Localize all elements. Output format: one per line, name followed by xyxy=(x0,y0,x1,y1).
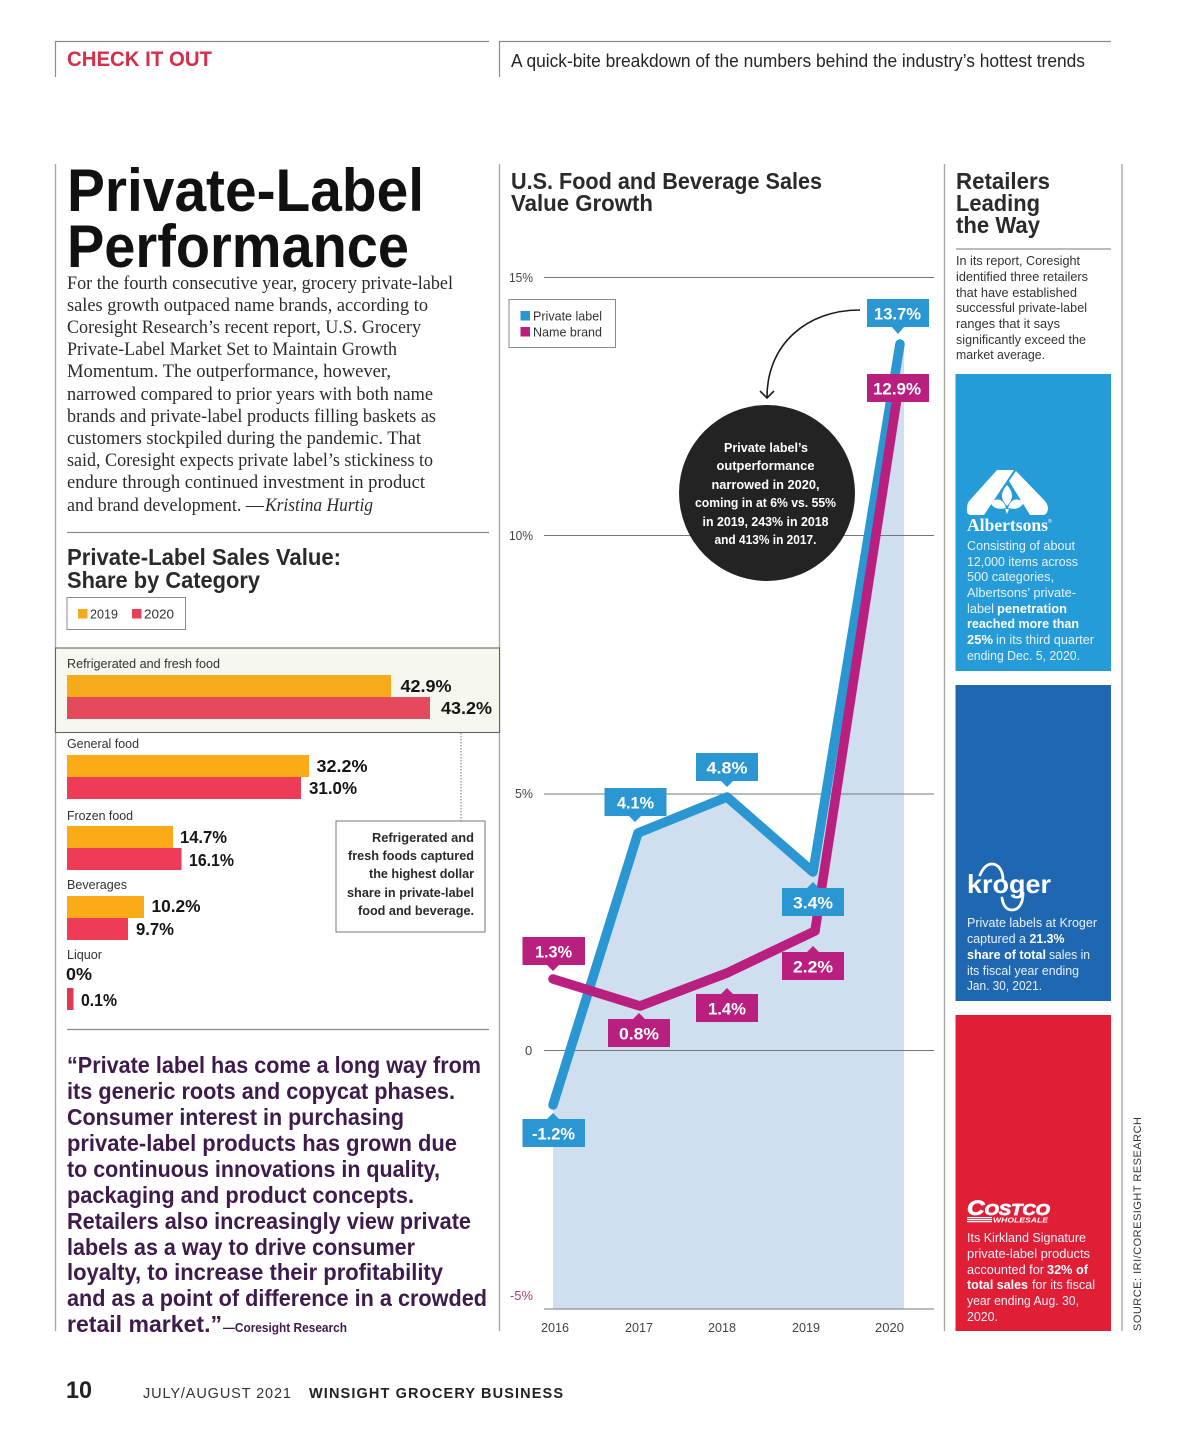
bar chart legend: 2020 xyxy=(144,606,174,622)
pull quote: its generic roots and copycat phases. xyxy=(67,1078,455,1104)
Kroger text: captured a xyxy=(967,932,1027,946)
data label: name brand 2016: 1.3% xyxy=(535,942,572,962)
bar chart heading xyxy=(67,544,341,593)
y axis and gridlines: 15% xyxy=(509,270,533,285)
Costco text xyxy=(967,1231,1095,1324)
pull quote: Retailers also increasingly view private xyxy=(67,1208,471,1234)
footer: page number: 10 xyxy=(66,1377,92,1404)
x axis labels: 2019 xyxy=(792,1320,820,1335)
bars: refrigerated and fresh food: Refrigerated and fresh food xyxy=(67,656,220,671)
Kroger text: Jan. 30, 2021. xyxy=(967,979,1042,993)
bars: liquor: 0% xyxy=(66,964,92,984)
bars: frozen food: Frozen food xyxy=(67,808,133,823)
icon: Albertsons logo: Albertsons xyxy=(967,515,1048,535)
icon: Albertsons logo xyxy=(967,470,1052,535)
bars: general food: 32.2% xyxy=(316,756,368,776)
retailers heading: Leading xyxy=(956,190,1040,216)
Kroger text xyxy=(967,916,1098,993)
Costco text: 2020. xyxy=(967,1310,998,1324)
header subtitle: A quick-bite breakdown of the numbers behind the industry’s hottest trends xyxy=(511,51,1085,71)
Albertsons text: 25% xyxy=(967,633,993,647)
retailers intro text xyxy=(956,254,1088,362)
callout: refrigerated and fresh foods: Refrigerated and xyxy=(372,831,474,845)
pull quote: private-label products has grown due xyxy=(67,1130,457,1156)
bars: liquor xyxy=(66,947,117,1010)
intro text block: customers stockpiled during the pandemic. That xyxy=(67,429,422,449)
Albertsons text xyxy=(967,539,1095,663)
bars: general food: General food xyxy=(67,736,139,751)
bars: refrigerated and fresh food: 43.2% xyxy=(441,698,492,718)
retailers heading: Retailers xyxy=(956,168,1050,194)
bars: general food: 31.0% xyxy=(309,778,357,798)
x axis labels: 2017 xyxy=(625,1320,653,1335)
footer: issue date: JULY/AUGUST 2021 xyxy=(143,1386,291,1402)
area under private label line xyxy=(553,343,904,1309)
Albertsons text: 12,000 items across xyxy=(967,555,1078,569)
pull quote: —Coresight Research xyxy=(223,1320,347,1335)
bar chart heading: Share by Category xyxy=(67,567,260,593)
footer: publication: WINSIGHT GROCERY BUSINESS xyxy=(309,1386,563,1402)
Costco text: Its Kirkland Signature xyxy=(967,1231,1086,1245)
retailers intro text: successful private-label xyxy=(956,301,1087,315)
retailers heading: the Way xyxy=(956,212,1040,238)
Kroger text: share of total xyxy=(967,948,1046,962)
y axis and gridlines xyxy=(509,270,934,1309)
title xyxy=(67,157,424,280)
line chart legend: Name brand xyxy=(533,324,602,340)
callout circle: outperformance: narrowed in 2020, xyxy=(712,478,820,492)
intro text block: endure through continued investment in product xyxy=(67,473,426,493)
title: Performance xyxy=(67,213,409,280)
pull quote: retail market.” xyxy=(67,1311,222,1337)
pull quote xyxy=(67,1052,487,1337)
y axis and gridlines: 0 xyxy=(525,1043,532,1058)
callout circle: outperformance xyxy=(679,405,855,581)
bar chart legend: 2019 xyxy=(90,606,118,622)
bars: general food xyxy=(67,736,368,799)
pull quote: and as a point of difference in a crowded xyxy=(67,1285,487,1311)
data label: private label 2017 xyxy=(604,788,666,822)
line: name brand xyxy=(553,385,899,1006)
bars: frozen food: 16.1% xyxy=(189,850,234,870)
bars: liquor: 0.1% xyxy=(81,990,117,1010)
data label: private label 2016: -1.2% xyxy=(532,1124,575,1144)
retailers intro text: significantly exceed the xyxy=(956,333,1086,347)
line chart heading: U.S. Food and Beverage Sales xyxy=(511,168,822,194)
data label: name brand 2017: 0.8% xyxy=(619,1024,659,1044)
retailers intro text: In its report, Coresight xyxy=(956,254,1081,268)
title: Private-Label xyxy=(67,157,424,224)
intro text block: brands and private-label products filling baskets as xyxy=(67,407,436,427)
x axis labels: 2018 xyxy=(708,1320,736,1335)
bars: liquor: Liquor xyxy=(67,947,103,962)
Albertsons text: in its third quarter xyxy=(996,633,1095,647)
callout: refrigerated and fresh foods: share in private-label xyxy=(347,886,474,900)
bars: beverages: 10.2% xyxy=(152,896,201,916)
data label: private label 2018 xyxy=(696,753,758,787)
Albertsons text: 500 categories, xyxy=(967,570,1054,584)
retailers heading xyxy=(956,168,1050,238)
bars: refrigerated and fresh food: 42.9% xyxy=(400,676,452,696)
y axis and gridlines: 5% xyxy=(515,786,533,801)
data label: name brand 2019 xyxy=(782,946,844,980)
callout circle: outperformance: outperformance xyxy=(716,459,814,473)
line chart legend xyxy=(509,300,616,348)
intro text block: For the fourth consecutive year, grocery private-label xyxy=(67,274,453,294)
Kroger text: 21.3% xyxy=(1030,932,1064,946)
highlight band xyxy=(56,648,500,732)
data label: private label 2016 xyxy=(522,1113,585,1147)
pull quote: to continuous innovations in quality, xyxy=(67,1156,440,1182)
Albertsons text: ending Dec. 5, 2020. xyxy=(967,649,1080,663)
panel: Costco xyxy=(956,1015,1111,1331)
section tag: check it out: CHECK IT OUT xyxy=(67,48,212,71)
bars: refrigerated and fresh food xyxy=(67,656,492,719)
data label: private label 2020 xyxy=(867,299,929,334)
callout: refrigerated and fresh foods: fresh foods captured xyxy=(348,849,474,863)
data label: name brand 2020 xyxy=(867,374,929,402)
data label: private label 2018: 4.8% xyxy=(706,758,748,778)
line: private label xyxy=(553,344,900,1105)
bars: frozen food: 14.7% xyxy=(180,827,227,847)
bar chart heading: Private-Label Sales Value: xyxy=(67,544,341,570)
data label: name brand 2019: 2.2% xyxy=(793,958,833,976)
Albertsons text: Albertsons’ private- xyxy=(967,586,1076,600)
x axis labels: 2020 xyxy=(875,1320,904,1335)
x axis labels: 2016 xyxy=(541,1320,569,1335)
retailers intro text: market average. xyxy=(956,348,1045,362)
Kroger text: Private labels at Kroger xyxy=(967,916,1098,930)
Kroger text: its fiscal year ending xyxy=(967,964,1079,978)
source note: SOURCE: IRI/CORESIGHT RESEARCH xyxy=(1132,1117,1144,1331)
callout circle: outperformance: coming in at 6% vs. 55% xyxy=(695,496,836,510)
icon: Kroger logo: kroger xyxy=(967,869,1051,899)
intro text block: narrowed compared to prior years with both name xyxy=(67,385,433,405)
line chart heading xyxy=(511,168,822,216)
data label: name brand 2018 xyxy=(696,988,758,1022)
callout: refrigerated and fresh foods xyxy=(336,821,485,932)
x axis labels xyxy=(541,1320,904,1335)
Costco text: for its fiscal xyxy=(1032,1278,1095,1292)
data label: private label 2017: 4.1% xyxy=(617,794,654,812)
pull quote: loyalty, to increase their profitability xyxy=(67,1259,443,1285)
intro text block xyxy=(67,274,453,516)
y axis and gridlines: -5% xyxy=(510,1288,533,1303)
icon: Albertsons logo: ® xyxy=(1048,518,1052,525)
Costco text: year ending Aug. 30, xyxy=(967,1294,1079,1308)
icon: Costco logo: WHOLESALE xyxy=(993,1218,1048,1224)
Costco text: 32% of xyxy=(1047,1263,1089,1277)
data label: name brand 2020: 12.9% xyxy=(873,380,921,398)
Costco text: total sales xyxy=(967,1278,1028,1292)
intro text block: and brand development. — xyxy=(67,496,264,516)
pull quote: “Private label has come a long way from xyxy=(67,1052,481,1078)
intro text block: Kristina Hurtig xyxy=(264,496,373,516)
Costco text: private-label products xyxy=(967,1247,1090,1261)
line chart legend: Private label xyxy=(533,308,602,324)
line chart heading: Value Growth xyxy=(511,190,653,216)
icon: Kroger logo xyxy=(967,864,1051,910)
callout: refrigerated and fresh foods: food and beverage. xyxy=(358,904,474,918)
pull quote: labels as a way to drive consumer xyxy=(67,1234,415,1260)
intro text block: Coresight Research’s recent report, U.S. Grocery xyxy=(67,318,422,338)
intro text block: said, Coresight expects private label’s stickiness to xyxy=(67,451,433,471)
Albertsons text: label xyxy=(967,602,994,616)
panel: Albertsons xyxy=(956,374,1111,671)
Albertsons text: penetration xyxy=(997,602,1067,616)
bars: beverages xyxy=(67,877,201,940)
icon: Costco logo: COSTCO xyxy=(967,1197,1051,1220)
retailers intro text: ranges that it says xyxy=(956,317,1060,331)
data label: name brand 2018: 1.4% xyxy=(708,1000,746,1018)
data label: name brand 2017 xyxy=(608,1013,670,1047)
Costco text: accounted for xyxy=(967,1263,1045,1277)
callout circle: outperformance: Private label’s xyxy=(724,441,808,455)
retailers intro text: identified three retailers xyxy=(956,270,1088,284)
callout: refrigerated and fresh foods: the highest dollar xyxy=(369,867,474,881)
data label: private label 2020: 13.7% xyxy=(874,304,921,324)
bars: beverages: Beverages xyxy=(67,877,127,892)
intro text block: sales growth outpaced name brands, according to xyxy=(67,296,428,316)
data label: name brand 2016 xyxy=(522,937,585,971)
callout circle: outperformance: in 2019, 243% in 2018 xyxy=(702,515,828,529)
intro text block: Private-Label Market Set to Maintain Growth xyxy=(67,340,397,360)
bars: beverages: 9.7% xyxy=(136,919,174,939)
panel: Kroger xyxy=(956,685,1111,1001)
bars: frozen food xyxy=(67,808,234,870)
intro text block: Momentum. The outperformance, however, xyxy=(67,362,391,382)
bar chart: share by category xyxy=(56,648,500,1010)
bar chart legend xyxy=(67,598,186,630)
Albertsons text: Consisting of about xyxy=(967,539,1075,553)
Albertsons text: reached more than xyxy=(967,617,1079,631)
line chart xyxy=(509,270,934,1335)
data label: private label 2019: 3.4% xyxy=(793,894,833,912)
retailers intro text: that have established xyxy=(956,286,1077,300)
Kroger text: sales in xyxy=(1049,948,1090,962)
data label: private label 2019 xyxy=(782,882,844,916)
callout circle: outperformance: and 413% in 2017. xyxy=(714,533,816,547)
pull quote: packaging and product concepts. xyxy=(67,1182,414,1208)
pull quote: Consumer interest in purchasing xyxy=(67,1104,404,1130)
y axis and gridlines: 10% xyxy=(509,528,533,543)
arrow: 13.7% label to callout xyxy=(760,310,860,398)
